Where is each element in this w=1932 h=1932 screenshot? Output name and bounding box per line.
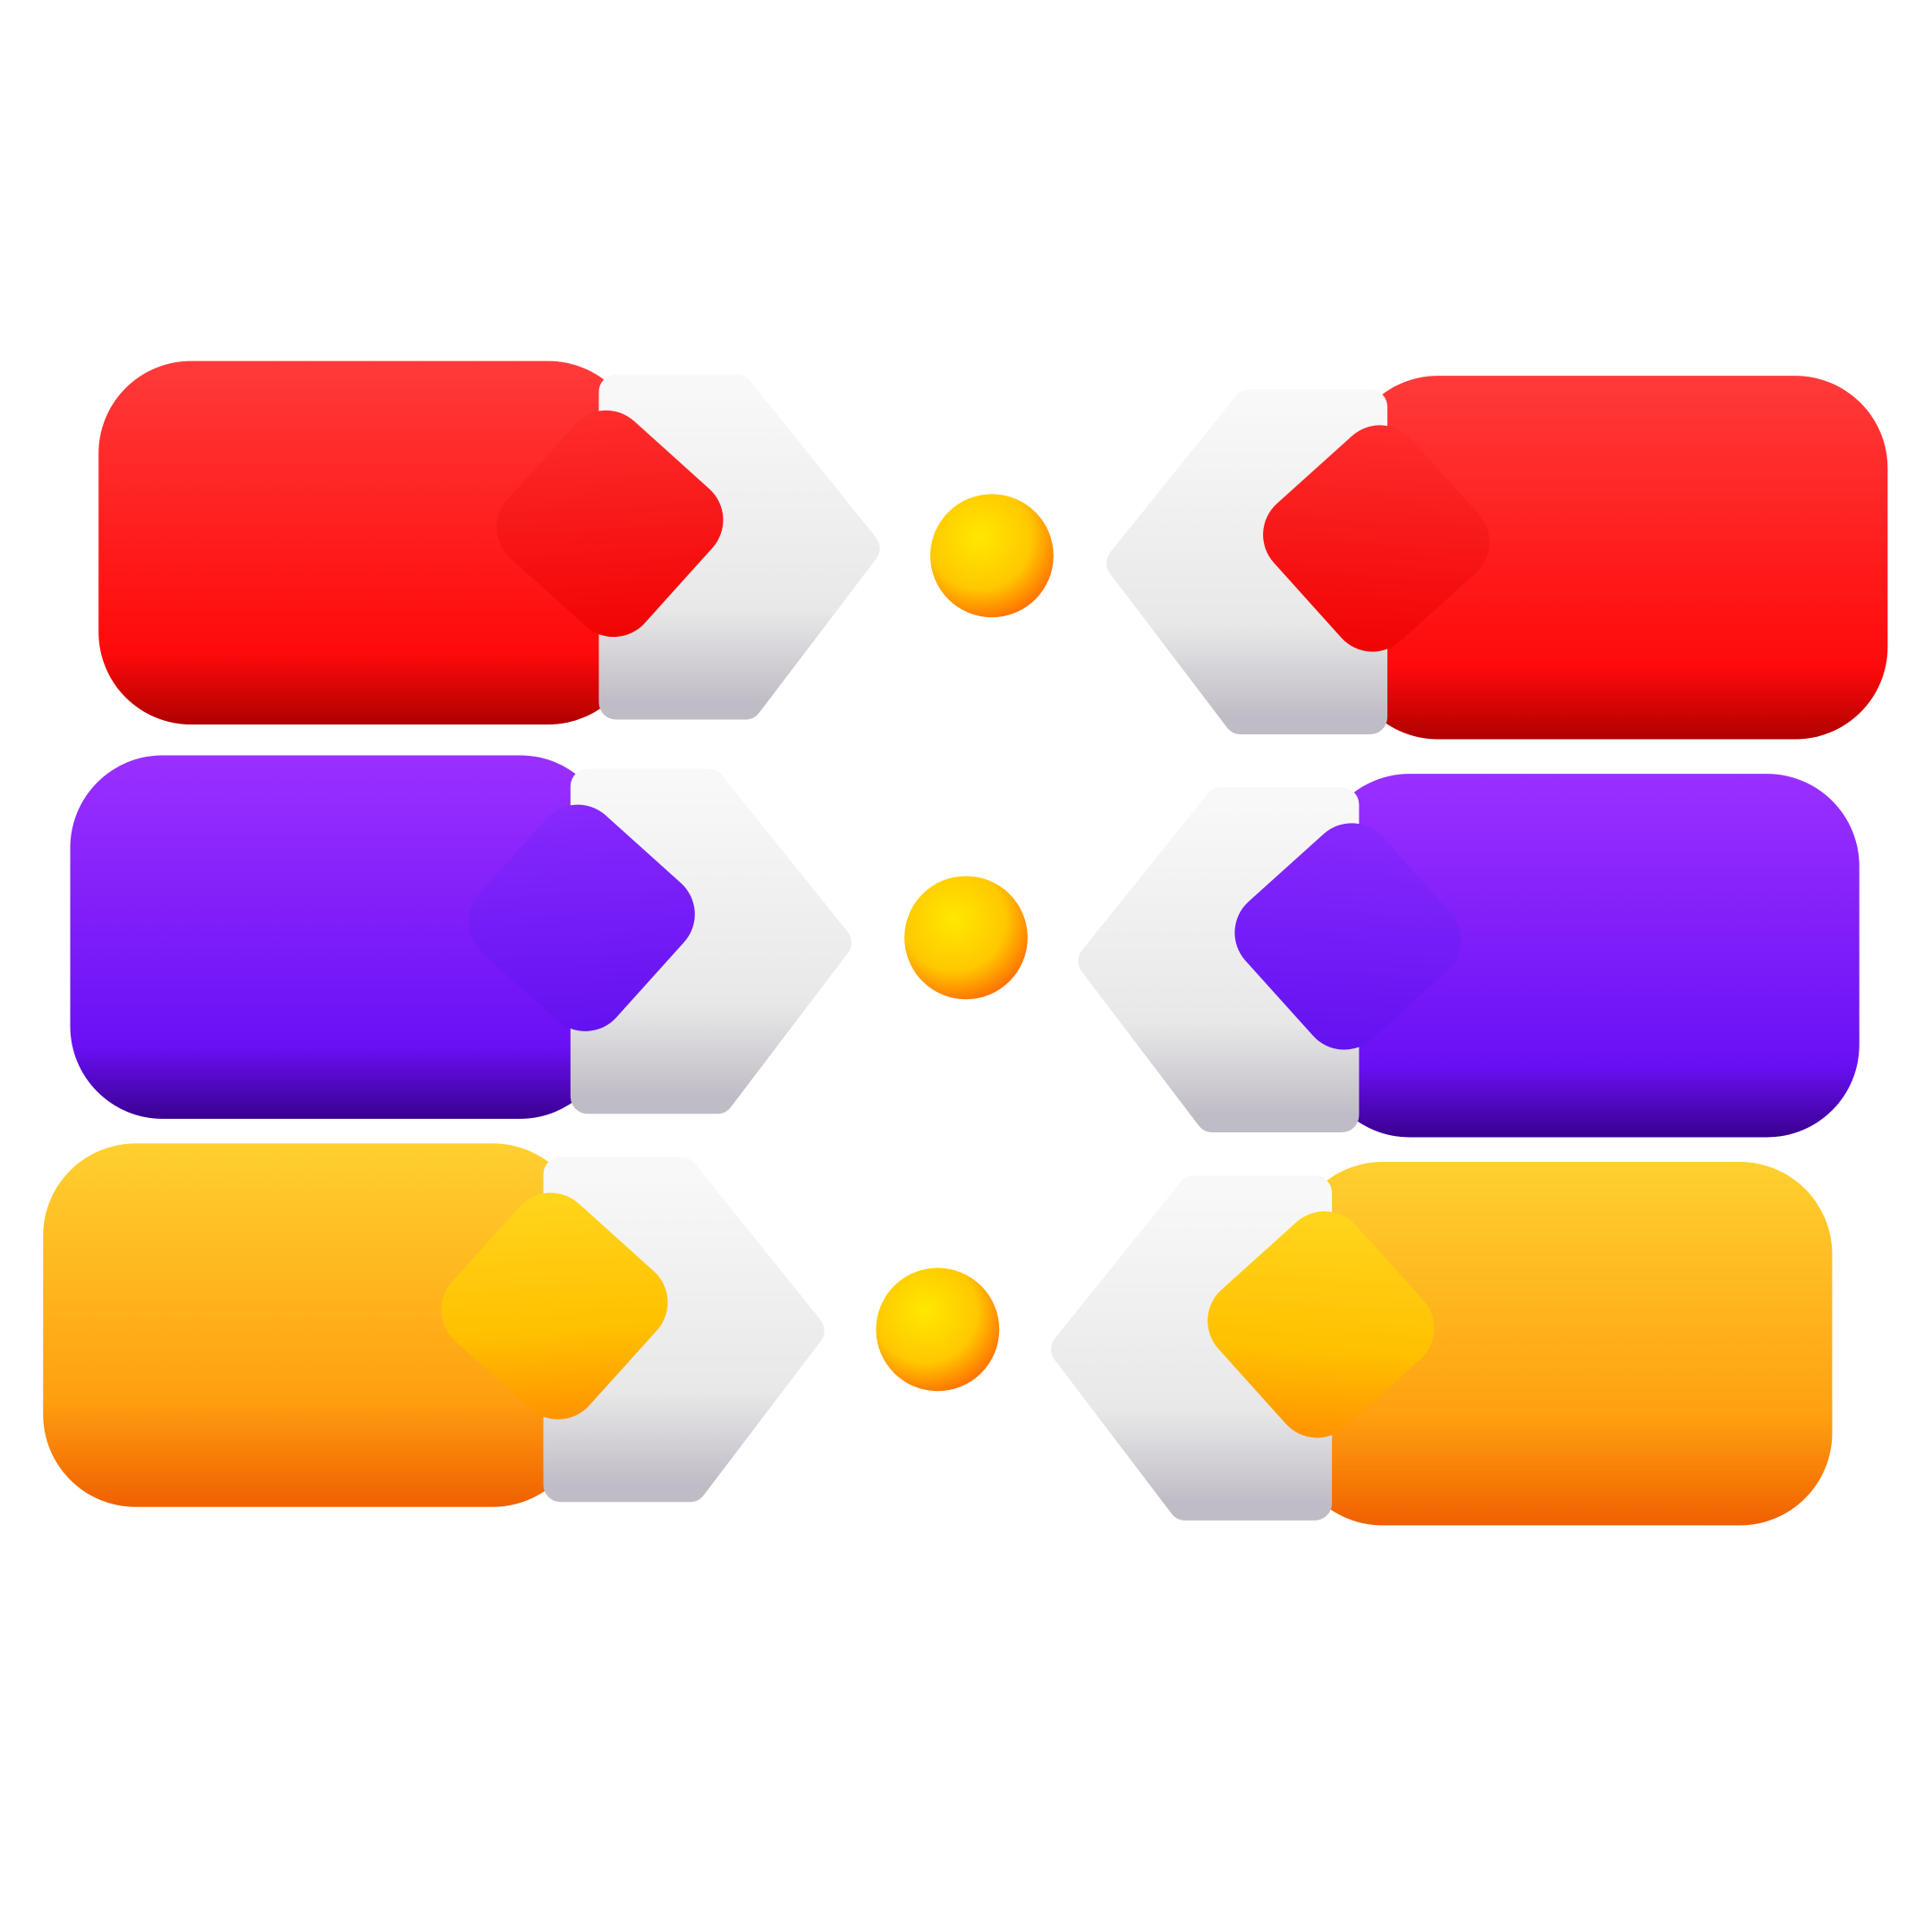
capsule: purple right: [1096, 774, 1860, 1137]
diamond: [451, 787, 712, 1048]
capsule: red left: [98, 361, 862, 724]
capsule: purple left: [71, 755, 835, 1119]
diamond: [1191, 1194, 1452, 1455]
diamond: [1246, 408, 1507, 669]
capsule: orange left: [43, 1143, 807, 1507]
dot: row 3: [876, 1268, 999, 1391]
capsule: red right: [1123, 376, 1887, 740]
dot: row 2: [904, 876, 1028, 999]
capsule: orange right: [1068, 1162, 1832, 1525]
dot: row 1: [930, 494, 1054, 617]
diamond: [1217, 806, 1479, 1067]
diamond: [479, 394, 741, 654]
diamond: [424, 1175, 685, 1436]
